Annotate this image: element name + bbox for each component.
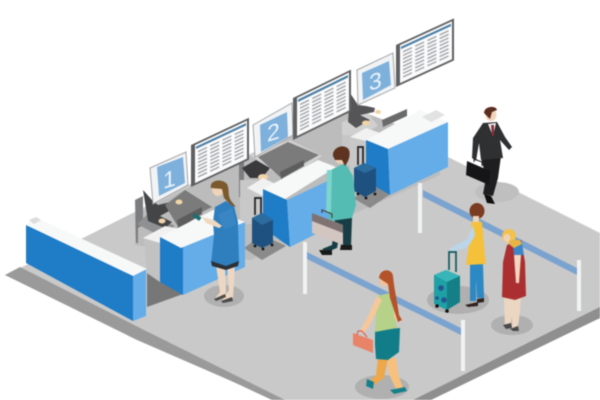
screen: counter 1 number: 1: [163, 165, 176, 194]
person: woman in blue dress: [193, 181, 244, 307]
check-in counter 1: [143, 210, 245, 307]
rope barrier back: [418, 183, 581, 311]
person: woman in yellow vest with teal suitcase: [427, 203, 489, 314]
back wall floor shade: [135, 106, 440, 260]
screen: counter 3 number: [357, 53, 395, 105]
person: blonde woman in red dress: [491, 229, 533, 335]
agent station 3: [342, 93, 407, 165]
flight board 1: [191, 118, 249, 187]
mat under counter 3 luggage: [353, 182, 392, 208]
rope barrier front: [303, 242, 465, 371]
person: walking woman with red handbag: [353, 270, 409, 399]
screen: counter 3 number: 3: [369, 67, 382, 96]
baggage: dark blue suitcase at counter 2: [354, 147, 376, 199]
flight board 3: [396, 18, 454, 87]
floor: [5, 106, 600, 400]
baggage: dark blue suitcase at counter 1: [252, 198, 273, 250]
front barrier counter: [26, 217, 147, 321]
check-in counter 2: [247, 160, 336, 247]
person: man in black suit: [466, 107, 519, 204]
screen: counter 2 number: [253, 103, 293, 157]
screen: counter 2 number: 2: [267, 118, 280, 147]
mat under counter 2 luggage: [244, 235, 286, 260]
agent station 2: [239, 140, 322, 224]
person: man with teal jacket and briefcase: [312, 146, 356, 255]
agent station 1: [135, 190, 212, 243]
flight board 2: [293, 70, 351, 140]
check-in counter 3: [350, 110, 448, 195]
screen: counter 1 number: [150, 152, 188, 204]
